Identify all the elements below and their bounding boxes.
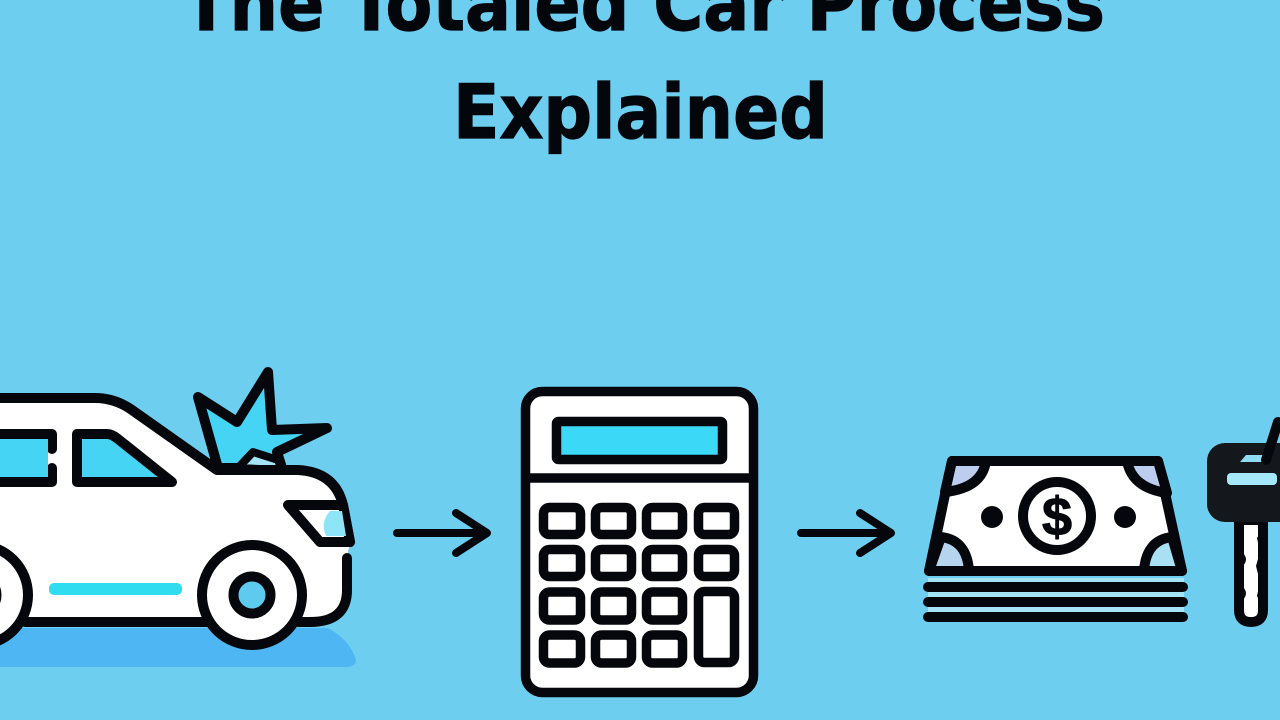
icon: stack of money <box>928 461 1184 617</box>
icon: crashed car <box>0 372 356 667</box>
front wheel <box>202 545 302 645</box>
key blade <box>1239 520 1263 622</box>
headlight <box>288 505 350 542</box>
title <box>183 0 1105 156</box>
arrow: calculator to money <box>801 513 891 553</box>
dollar coin <box>1023 482 1091 550</box>
stacked notes <box>928 587 1183 617</box>
front window <box>77 434 172 482</box>
calculator screen <box>556 422 722 460</box>
key fob <box>1207 443 1280 522</box>
side stripe <box>49 583 182 595</box>
icon: car key <box>1207 422 1280 622</box>
car body <box>0 398 350 640</box>
icon: calculator <box>526 392 754 692</box>
rear window <box>0 434 52 482</box>
banknote <box>929 461 1182 571</box>
calculator keys <box>544 508 734 663</box>
light paper edges <box>928 578 1184 616</box>
note corners <box>945 461 986 492</box>
note dots <box>981 506 1003 528</box>
arrow: car to calculator <box>397 513 487 553</box>
impact star <box>198 372 327 468</box>
title: Explained <box>453 68 828 156</box>
rear wheel <box>0 545 28 645</box>
icon: stack of money: $ <box>1042 487 1072 547</box>
key ring strap <box>1266 422 1278 460</box>
car ground shadow <box>0 628 356 667</box>
